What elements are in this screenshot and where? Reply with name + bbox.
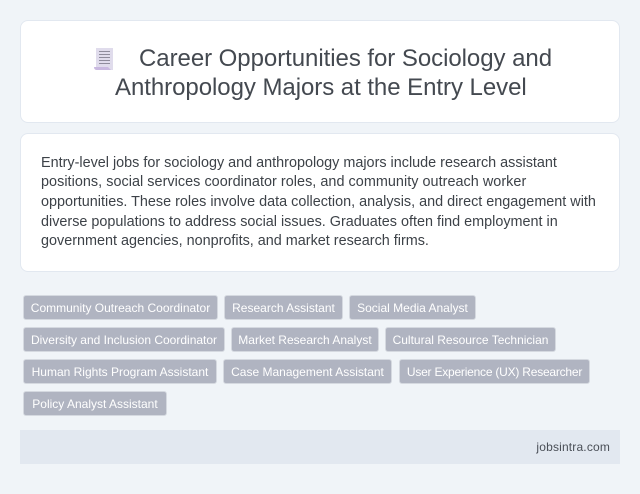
- tag: Social Media Analyst: [357, 301, 468, 315]
- footer source text: jobsintra.com: [536, 440, 610, 454]
- tag: [23, 295, 218, 320]
- text: government agencies, nonprofits, and market research firms.: [41, 233, 429, 249]
- tag: [231, 327, 379, 352]
- tag: User Experience (UX) Researcher: [407, 365, 582, 379]
- icon: scroll document: [94, 48, 113, 70]
- tag: Research Assistant: [232, 301, 335, 315]
- text: Entry-level jobs for sociology and anthropology majors include research assistant: [41, 155, 557, 171]
- tag: [23, 327, 225, 352]
- tag: [349, 295, 476, 320]
- text: positions, social services coordinator roles, and community outreach worker: [41, 174, 526, 190]
- tag: Policy Analyst Assistant: [32, 397, 158, 411]
- tag: Diversity and Inclusion Coordinator: [31, 333, 217, 347]
- title line 2: Anthropology Majors at the Entry Level: [115, 74, 527, 101]
- tag: [224, 295, 343, 320]
- tag: Human Rights Program Assistant: [32, 365, 208, 379]
- tag: Case Management Assistant: [231, 365, 384, 379]
- tag list: [23, 295, 590, 416]
- tag: [23, 391, 167, 416]
- tag: [223, 359, 392, 384]
- tag: [399, 359, 590, 384]
- tag: Market Research Analyst: [238, 333, 372, 347]
- description text: [41, 155, 596, 249]
- text: diverse populations to address social issues. Graduates often find employment in: [41, 214, 558, 230]
- tag: [385, 327, 556, 352]
- panel: title card: [20, 20, 620, 123]
- text: opportunities. These roles involve data collection, analysis, and direct engagement with: [41, 194, 596, 210]
- tag: Cultural Resource Technician: [393, 333, 548, 347]
- tag: Community Outreach Coordinator: [31, 301, 210, 315]
- title line 1: Career Opportunities for Sociology and: [139, 45, 552, 72]
- footer bar: [20, 430, 620, 464]
- panel: description card: [20, 133, 620, 272]
- tag: [23, 359, 217, 384]
